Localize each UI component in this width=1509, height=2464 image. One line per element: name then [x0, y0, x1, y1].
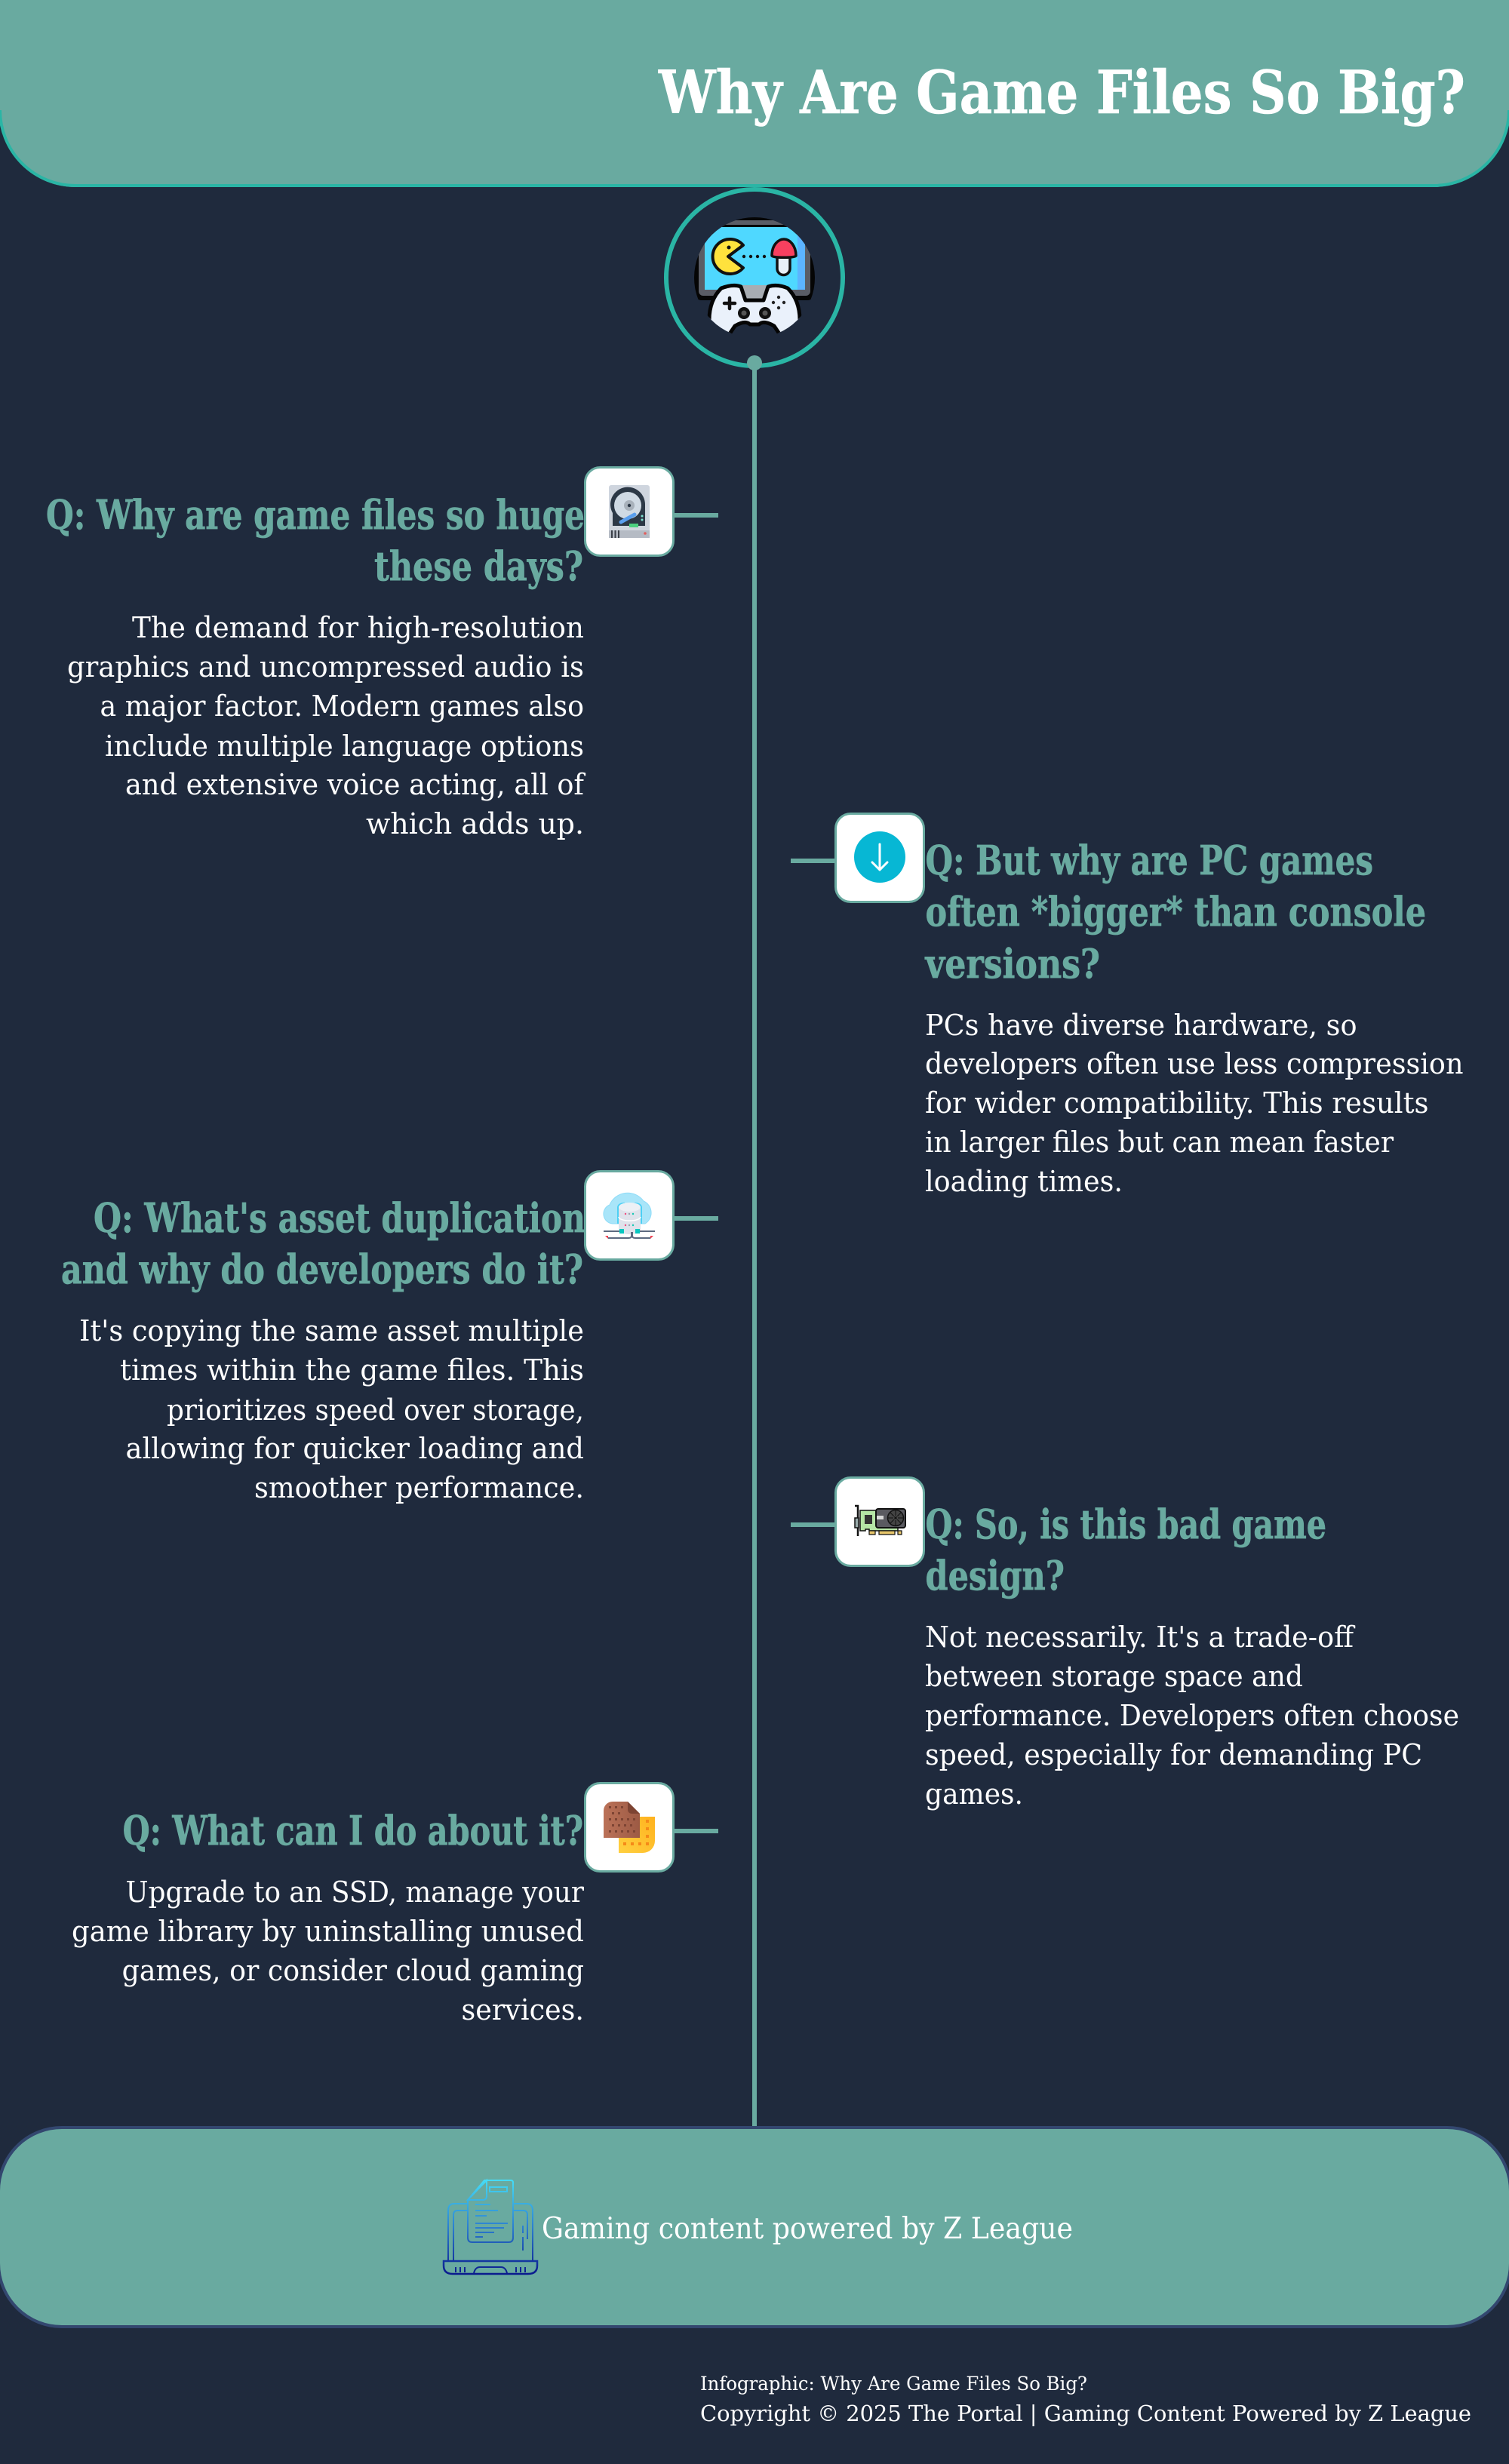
- text: answer 3: allowing for quicker loading and: [125, 1432, 584, 1465]
- text: answer 4: Not necessarily. It's a trade-off: [925, 1621, 1356, 1654]
- copyright block: [700, 2373, 1471, 2426]
- icon: laptop with document: [444, 2180, 537, 2274]
- text: answer 5: game library by uninstalling unused: [72, 1915, 584, 1948]
- connector 4: [791, 1522, 837, 1527]
- icon: hard drive: [585, 468, 673, 555]
- icon: graphics card: [836, 1477, 924, 1566]
- text: answer 4: [925, 1621, 1459, 1811]
- text: answer 2: developers often use less compression: [925, 1047, 1464, 1080]
- text: answer 5: services.: [462, 1993, 584, 2026]
- text: answer 2: PCs have diverse hardware, so: [925, 1009, 1357, 1042]
- text: answer 3: smoother performance.: [254, 1471, 584, 1504]
- text: answer 1: The demand for high-resolution: [132, 611, 584, 644]
- panel: question 2: [791, 813, 1464, 1198]
- text: answer 3: [79, 1314, 584, 1504]
- connector 2: [791, 859, 837, 863]
- heading: question 1: [46, 492, 585, 590]
- text: answer 1: and extensive voice acting, all of: [125, 768, 586, 801]
- icon: download arrow: [836, 813, 924, 902]
- heading: question 1: these days?: [374, 543, 583, 590]
- text: answer 4: between storage space and: [925, 1660, 1303, 1693]
- heading: question 3: Q: What's asset duplication: [94, 1195, 585, 1242]
- panel: question 3: [61, 1171, 718, 1504]
- text: powered by: Gaming content powered by Z League: [542, 2212, 1073, 2246]
- panel: question 1: [46, 468, 718, 840]
- text: answer 1: include multiple language options: [105, 730, 584, 763]
- heading: question 2: Q: But why are PC games: [925, 837, 1373, 884]
- heading: question 4: design?: [925, 1553, 1065, 1599]
- icon: game controller and screen in circle: [666, 189, 843, 370]
- text: answer 4: games.: [925, 1777, 1023, 1811]
- text: answer 2: in larger files but can mean faster: [925, 1126, 1394, 1159]
- connector 5: [673, 1829, 718, 1833]
- text: answer 3: prioritizes speed over storage,: [167, 1393, 584, 1427]
- heading: question 5: Q: What can I do about it?: [123, 1808, 583, 1854]
- panel: question 4: [791, 1477, 1459, 1811]
- icon: compressed files: [585, 1783, 673, 1871]
- copyright block: Infographic: Why Are Game Files So Big?: [700, 2373, 1087, 2395]
- text: answer 1: graphics and uncompressed audio is: [67, 650, 584, 684]
- connector 3: [673, 1216, 718, 1221]
- text: answer 3: It's copying the same asset multiple: [79, 1314, 584, 1347]
- text: answer 2: [925, 1009, 1464, 1198]
- copyright block: Copyright © 2025 The Portal | Gaming Content Powered by Z League: [700, 2401, 1471, 2426]
- panel: question 5: [72, 1783, 718, 2026]
- text: answer 4: speed, especially for demanding PC: [925, 1738, 1422, 1771]
- text: answer 5: [72, 1876, 585, 2026]
- header banner: [0, 0, 1509, 187]
- text: answer 2: for wider compatibility. This results: [925, 1086, 1429, 1120]
- text: answer 1: [67, 611, 586, 840]
- text: answer 3: times within the game files. This: [120, 1353, 584, 1387]
- text: answer 2: loading times.: [925, 1165, 1123, 1198]
- connector 1: [673, 513, 718, 518]
- footer banner: [0, 2128, 1509, 2327]
- heading: question 3: [61, 1195, 585, 1293]
- icon: cloud database: [585, 1171, 673, 1260]
- text: answer 5: Upgrade to an SSD, manage your: [125, 1876, 585, 1909]
- text: answer 1: which adds up.: [366, 807, 584, 840]
- timeline spine: [752, 363, 757, 2128]
- text: answer 4: performance. Developers often choose: [925, 1699, 1459, 1732]
- heading: question 4: Q: So, is this bad game: [925, 1501, 1326, 1548]
- text: answer 5: games, or consider cloud gaming: [122, 1954, 584, 1987]
- heading: question 2: [925, 837, 1426, 988]
- text: answer 1: a major factor. Modern games also: [100, 690, 584, 723]
- heading: question 3: and why do developers do it?: [61, 1246, 583, 1293]
- heading: question 1: Q: Why are game files so huge: [46, 492, 585, 539]
- heading: question 4: [925, 1501, 1326, 1599]
- heading: question 2: versions?: [925, 941, 1100, 988]
